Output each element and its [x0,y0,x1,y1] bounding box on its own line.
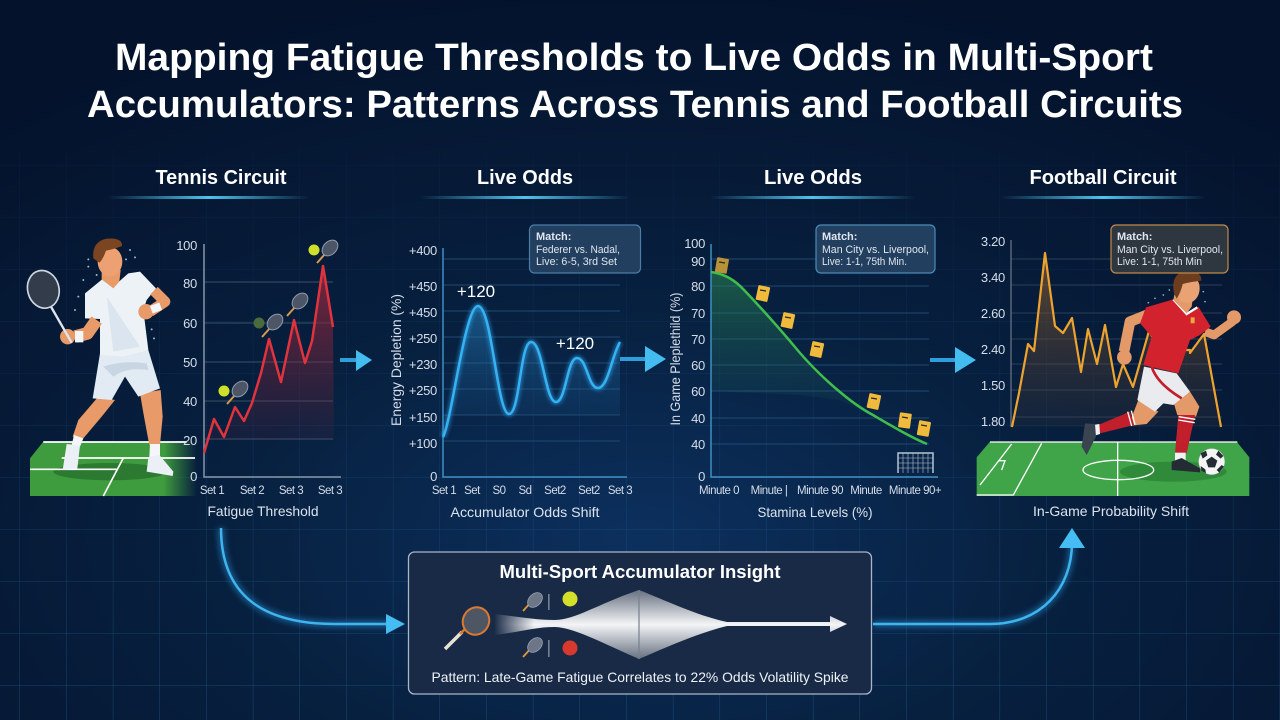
callout: Man City vs Liverpool orange: Live: 1-1, 75th Min [1117,256,1202,268]
x axis ticks: Set 1 [432,485,456,497]
x axis ticks: Minute 0 [699,485,739,497]
y axis ticks: 70 [691,332,705,347]
x axis ticks: Minute 90+ [889,485,942,497]
icon: goal [898,453,933,473]
y axis ticks: 40 [691,437,705,452]
arrow: flow from tennis to insight [221,528,405,634]
y axis ticks: 3.40 [981,270,1005,285]
icons: tennis row [523,590,578,611]
arrow: odds to stamina [620,346,666,372]
tennis racket [23,267,72,343]
y axis ticks: 2.40 [981,342,1005,357]
y axis ticks: 100 [684,236,705,251]
y axis ticks: 60 [691,358,705,373]
heading: Live Odds right: Live Odds [764,167,862,189]
y axis ticks: 0 [698,469,705,484]
x axis ticks: Set [464,485,481,497]
racket and ball markers [218,237,341,404]
x axis ticks [699,485,942,497]
x axis ticks: Minute | [751,485,787,497]
y axis ticks: 20 [183,433,197,448]
football pitch [977,442,1249,496]
y axis ticks: 60 [691,384,705,399]
y axis ticks: +400 [409,243,437,258]
x axis ticks [432,485,632,497]
heading: Tennis Circuit: Tennis Circuit [156,167,287,189]
y axis ticks: +450 [409,279,437,294]
heading: Live Odds right [710,167,915,199]
x axis ticks: Minute 90 [797,485,843,497]
y axis ticks: 3.20 [981,234,1005,249]
yellow card markers [715,257,931,437]
value labels [457,282,594,353]
callout: Man City vs Liverpool: Live: 1-1, 75th Min. [822,256,907,268]
y axis ticks: 90 [691,254,705,269]
callout: Man City vs Liverpool orange: Match: [1117,231,1152,243]
heading: Tennis Circuit [108,167,310,199]
chart: accumulator odds shift: Accumulator Odds Shift [450,504,600,520]
y axis ticks [409,243,437,484]
callout: Man City vs Liverpool: Match: [822,231,857,243]
panel: multi-sport accumulator insight [408,552,872,694]
y axis ticks: +250 [409,383,437,398]
y axis ticks: 50 [183,355,197,370]
callout: Federer vs Nadal [530,225,640,273]
x axis ticks: Set 3 [279,485,303,497]
title: Accumulators: Patterns Across Tennis and Football Circuits [87,84,1183,126]
y axis ticks: 40 [183,394,197,409]
y axis ticks: +450 [409,305,437,320]
x axis ticks: Set 3 [608,485,632,497]
y axis ticks: +230 [409,357,437,372]
icon: big tennis racket [445,602,494,649]
heading: Football Circuit: Football Circuit [1030,167,1177,189]
value labels: +120 [556,334,594,353]
arrow: tennis to odds [340,350,372,371]
y axis ticks: +100 [409,436,437,451]
y axis ticks [684,236,705,484]
callout: Man City vs Liverpool [816,225,935,273]
y axis ticks: 80 [183,276,197,291]
callout: Man City vs Liverpool orange: Man City vs. Liverpool, [1117,244,1223,256]
title: Mapping Fatigue Thresholds to Live Odds in Multi-Sport [115,37,1153,79]
tennis player [60,238,173,476]
tennis court [30,442,197,496]
y axis ticks: 100 [176,238,197,253]
y axis ticks: 0 [430,469,437,484]
panel: tennis player illustration [23,238,197,496]
x axis ticks: S0 [492,485,506,497]
chart: fatigue threshold [176,237,342,519]
callout: Man City vs Liverpool orange [1111,225,1228,273]
heading: Live Odds left [420,167,630,199]
x axis ticks: Minute [850,485,882,497]
y axis ticks: +250 [409,331,437,346]
heading: Live Odds left: Live Odds [477,167,573,189]
x axis ticks: Set 1 [200,485,224,497]
value labels: +120 [457,282,495,301]
chart: stamina levels: Stamina Levels (%) [758,504,872,520]
x axis ticks: Set2 [544,485,566,497]
y axis ticks [981,234,1005,429]
heading: Football Circuit [1000,167,1206,199]
panel heading: Multi-Sport Accumulator Insight [500,562,780,582]
caption: in-game probability shift: In-Game Probability Shift [1033,503,1189,519]
chart: accumulator odds shift [388,225,640,520]
chart: in-game probability [981,234,1222,429]
y axis ticks: 0 [190,469,197,484]
background [0,148,1280,720]
football player [1082,271,1241,472]
callout: Federer vs Nadal: Match: [536,231,571,243]
chart: stamina levels: In Game Pleplethild (%) [667,292,683,426]
callout: Federer vs Nadal: Federer vs. Nadal, [536,244,620,256]
volatility funnel arrow [494,590,847,659]
callout: Man City vs Liverpool: Man City vs. Liverpool, [822,244,929,256]
x axis ticks: Set2 [578,485,600,497]
y axis ticks: +150 [409,410,437,425]
y axis ticks: 1.80 [981,414,1005,429]
chart: fatigue threshold: Fatigue Threshold [208,503,318,519]
x axis ticks [200,485,342,497]
x axis ticks: Set 3 [318,485,342,497]
title [87,37,1183,126]
y axis ticks: 2.60 [981,306,1005,321]
chart: accumulator odds shift: Energy Depletion (%) [388,294,404,426]
y axis ticks: 60 [183,316,197,331]
y axis ticks: 40 [691,411,705,426]
y axis ticks: 80 [691,279,705,294]
y axis ticks [176,238,197,484]
icons: football row [523,635,578,657]
arrow: stamina to football [930,347,976,373]
y axis ticks: 1.50 [981,378,1005,393]
x axis ticks: Set 2 [240,485,264,497]
callout: Federer vs Nadal: Live: 6-5, 3rd Set [536,256,617,268]
arrow: flow from insight to football [873,528,1085,624]
pattern text: Pattern: Late-Game Fatigue Correlates to 22% Odds Volatility Spike [432,669,849,685]
icon: football [1199,449,1225,475]
chart: stamina levels [667,225,942,520]
panel: footballer illustration [977,271,1249,496]
y axis ticks: 70 [691,306,705,321]
x axis ticks: Sd [518,485,532,497]
